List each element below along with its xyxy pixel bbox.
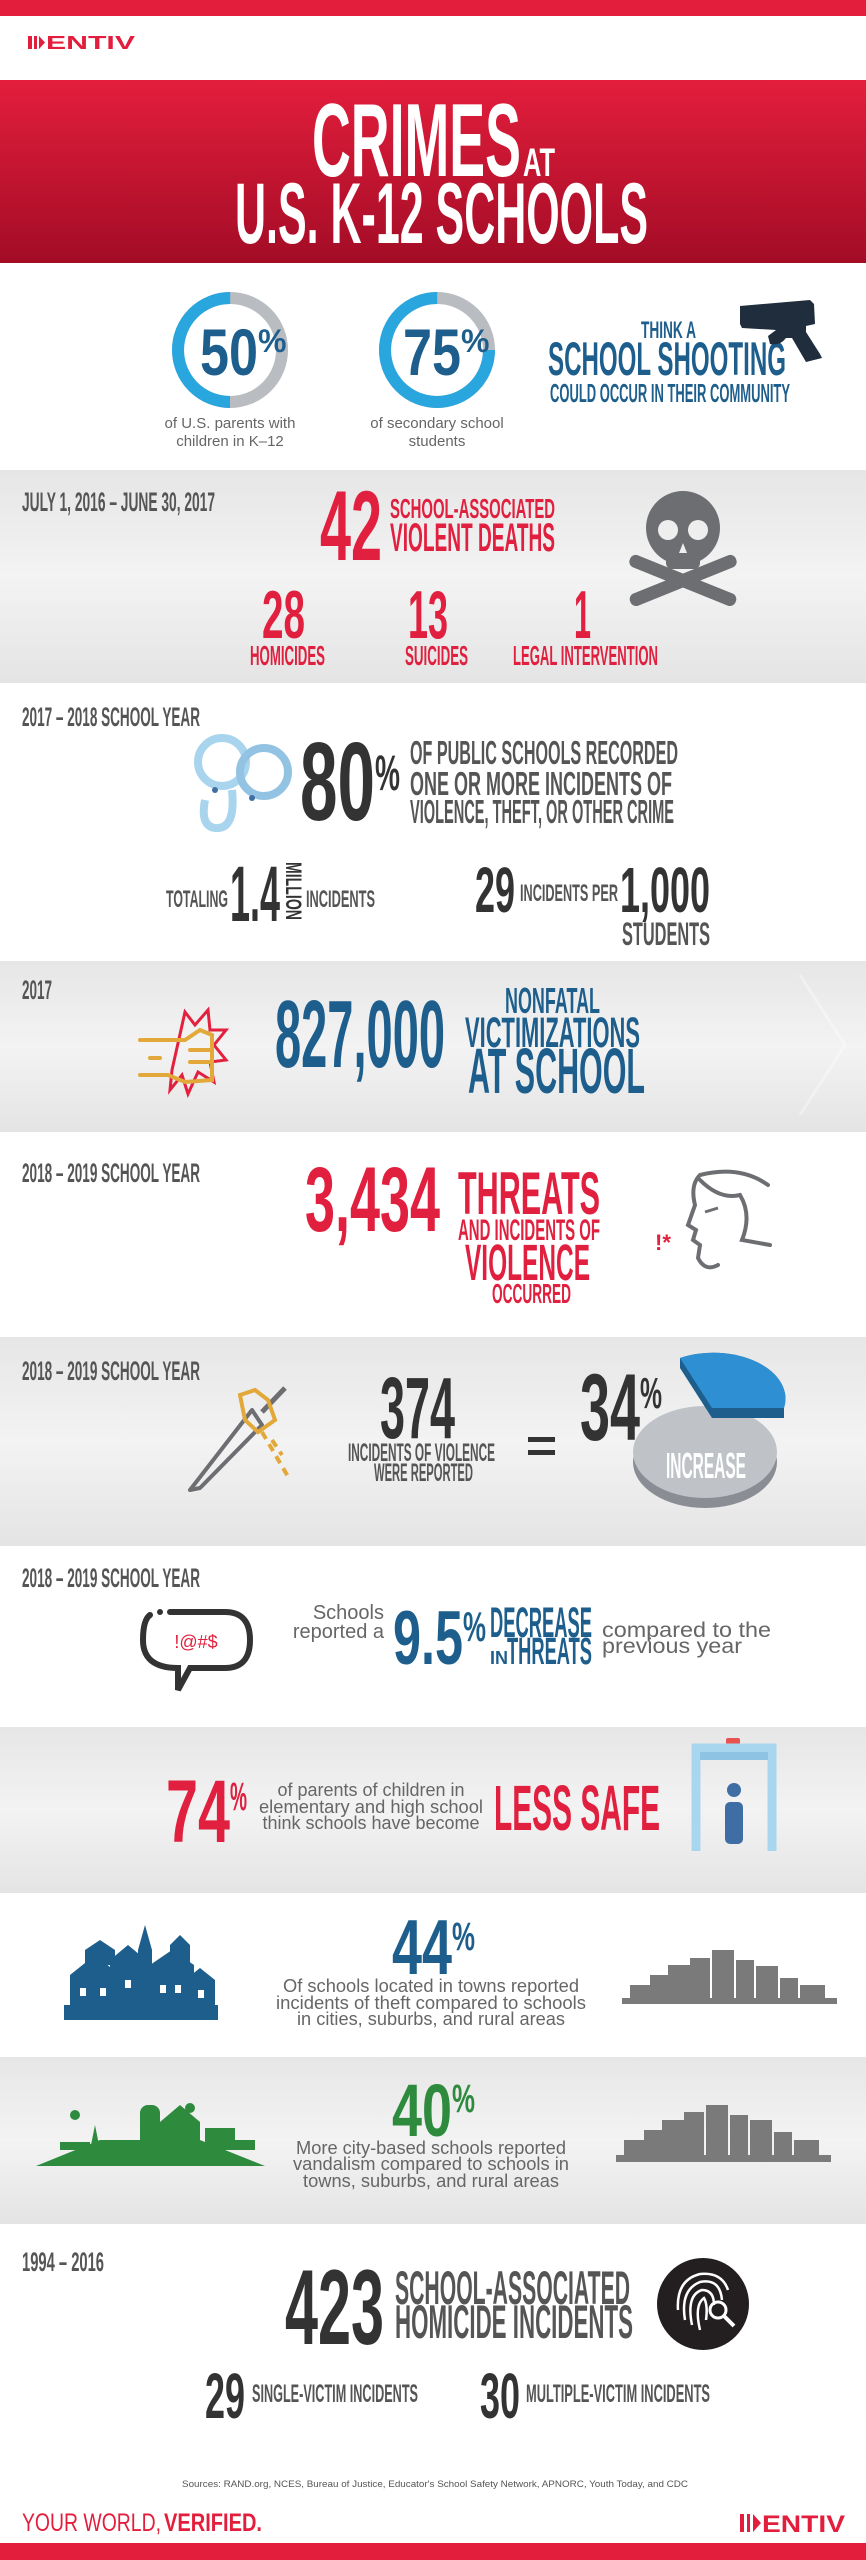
donut: 75% students: students	[409, 433, 465, 450]
icon: shouting face: !*	[655, 1230, 671, 1255]
stat: 13 suicides	[405, 577, 468, 671]
panel: violent deaths: LEGAL INTERVENTION	[513, 640, 658, 671]
panel: 374 incidents: WERE REPORTED	[374, 1459, 473, 1487]
panel: 423 homicide incidents: 1994 – 2016	[22, 2247, 104, 2277]
panel: 9.5% decrease: compared to the	[602, 1619, 771, 1642]
stat: 29 single-victim: 29	[205, 2360, 245, 2432]
stat: 1.4 million: TOTALING	[166, 886, 228, 913]
panel: nonfatal victimizations: 2017	[22, 975, 52, 1005]
panel: 374 incidents	[0, 1337, 866, 1546]
panel: threats 3,434: 3,434	[305, 1149, 440, 1251]
panel: 9.5% decrease: %	[463, 1603, 486, 1650]
panel: 40% vandalism in cities: 40	[392, 2069, 452, 2152]
panel: nonfatal victimizations: NONFATAL	[505, 980, 600, 1021]
panel: 9.5% decrease: previous year	[602, 1635, 742, 1658]
icon: town	[64, 1925, 218, 2020]
logo: identiv bottom	[740, 2511, 845, 2538]
donut: 75% students: of secondary school	[370, 415, 504, 432]
panel: 40% vandalism in cities: towns, suburbs, and rural areas	[303, 2171, 559, 2191]
icon: speech bubble: !@#$	[174, 1632, 218, 1652]
stat: 1.4 million: 1.4	[230, 849, 280, 938]
panel: 74% less safe: %	[230, 1775, 247, 1819]
equals sign	[528, 1437, 555, 1455]
panel: threats 3,434: 2018 – 2019 SCHOOL YEAR	[22, 1158, 200, 1188]
panel: violent deaths: SUICIDES	[405, 640, 468, 671]
panel: 374 incidents: INCIDENTS OF VIOLENCE	[348, 1439, 495, 1467]
stat: 13 suicides: 13	[408, 577, 448, 653]
panel: 74% less safe	[0, 1727, 866, 1893]
donut: 50% parents: children in K–12	[176, 433, 284, 450]
panel: threats 3,434: THREATS	[458, 1160, 600, 1227]
panel: 9.5% decrease: THREATS	[507, 1631, 592, 1673]
stat: 29 per 1,000	[475, 854, 710, 952]
panel: threats 3,434: AND INCIDENTS OF	[458, 1214, 600, 1247]
panel: 40% vandalism in cities	[0, 2057, 866, 2224]
panel: 9.5% decrease: 2018 – 2019 SCHOOL YEAR	[22, 1563, 200, 1593]
stat: 30 multiple-victim: 30	[480, 2360, 520, 2432]
panel: 44% theft in towns: %	[452, 1915, 475, 1959]
stat: 28 homicides	[250, 577, 325, 671]
stat: 29 per 1,000: 29	[475, 854, 515, 926]
stat: 42 deaths: 42	[320, 470, 382, 581]
panel: violent deaths: JULY 1, 2016 – JUNE 30, 2017	[22, 487, 215, 517]
icon: speech bubble	[143, 1609, 250, 1690]
donut: 50% parents	[165, 298, 295, 450]
stat: 1 legal intervention: 1	[574, 577, 591, 653]
stat: 29 single-victim	[205, 2360, 418, 2432]
icon: farm	[36, 2103, 265, 2166]
stat: 1.4 million	[166, 849, 375, 938]
panel: 74% less safe: LESS SAFE	[494, 1772, 660, 1844]
logo: identiv top: ENTIV	[46, 33, 135, 53]
text: think a school shooting	[548, 317, 790, 408]
sources: Sources: RAND.org, NCES, Bureau of Justice, Educator's School Safety Network, APNORC, Youth Today, and CDC	[182, 2479, 688, 2490]
stat: 1.4 million: MILLION	[281, 862, 306, 920]
pie chart: 34% increase	[580, 1353, 785, 1508]
icon: shouting face	[655, 1172, 770, 1267]
icon: knife	[190, 1388, 290, 1490]
donut: 50% parents: 50	[200, 315, 258, 389]
panel: nonfatal victimizations	[0, 961, 866, 1132]
panel: 44% theft in towns: incidents of theft compared to schools	[276, 1993, 586, 2013]
stat: 28 homicides: 28	[262, 577, 305, 653]
pie chart: 34% increase: 34	[580, 1355, 640, 1461]
stat: 42 deaths: SCHOOL-ASSOCIATED	[390, 493, 555, 524]
panel: threats 3,434	[22, 1149, 770, 1309]
pie chart: 34% increase: INCREASE	[666, 1445, 746, 1486]
panel: 40% vandalism in cities: vandalism compared to schools in	[293, 2154, 569, 2174]
panel: 9.5% decrease: Schools	[313, 1602, 384, 1624]
stat: 30 multiple-victim	[480, 2360, 710, 2432]
panel: violent deaths	[0, 470, 866, 683]
panel: 9.5% decrease	[22, 1563, 771, 1690]
stat: 1 legal intervention	[513, 577, 658, 671]
panel: 80% public schools: %	[375, 745, 400, 801]
donut: 75% students: 75	[403, 315, 461, 389]
panel: 74% less safe: think schools have become	[262, 1813, 480, 1833]
header banner	[0, 80, 866, 263]
icon: skull	[628, 491, 738, 608]
panel: violent deaths: HOMICIDES	[250, 640, 325, 671]
footer tagline: VERIFIED.	[164, 2509, 262, 2537]
panel: 9.5% decrease: DECREASE	[490, 1599, 592, 1647]
title: CRIMES	[312, 83, 521, 199]
panel: 40% vandalism in cities: More city-based schools reported	[296, 2138, 566, 2158]
panel: violent deaths: VIOLENT DEATHS	[390, 516, 555, 560]
logo: identiv top	[28, 33, 135, 53]
panel: 74% less safe: of parents of children in	[277, 1780, 465, 1800]
panel: nonfatal victimizations: 827,000	[275, 981, 445, 1088]
panel: 9.5% decrease: IN	[490, 1648, 508, 1668]
text: think a school shooting: THINK A	[641, 317, 696, 344]
icon: handcuffs	[198, 738, 288, 828]
panel: 80% public schools: 2017 – 2018 SCHOOL YEAR	[22, 702, 200, 732]
panel: 423 homicide incidents: 423	[285, 2247, 384, 2367]
stat: 29 per 1,000: 1,000	[620, 854, 710, 926]
footer tagline: YOUR WORLD,	[22, 2509, 161, 2537]
panel: 74% less safe: elementary and high school	[259, 1797, 483, 1817]
stat: 29 per 1,000: INCIDENTS PER	[520, 880, 618, 907]
icon: fingerprint	[657, 2258, 749, 2350]
icon: city skyline 2	[616, 2105, 831, 2162]
panel: 80% public schools: 80	[300, 720, 375, 844]
panel: nonfatal victimizations: AT SCHOOL	[468, 1035, 645, 1107]
panel: nonfatal victimizations: VICTIMIZATIONS	[465, 1009, 640, 1057]
donut: 50% parents: %	[258, 323, 286, 359]
stat: 42 deaths	[320, 470, 555, 581]
icon: fist	[140, 1010, 226, 1094]
panel: 74% less safe: 74	[166, 1761, 230, 1861]
pie chart: 34% increase: %	[640, 1369, 662, 1418]
logo: identiv bottom: ENTIV	[762, 2511, 845, 2538]
panel: 44% theft in towns	[64, 1903, 837, 2029]
stat: 29 per 1,000: STUDENTS	[622, 916, 710, 952]
panel: 44% theft in towns: 44	[392, 1903, 452, 1991]
icon: handgun	[740, 300, 822, 362]
panel: threats 3,434: VIOLENCE	[465, 1234, 590, 1291]
panel: 9.5% decrease: 9.5	[393, 1596, 463, 1681]
icon: security scanner	[696, 1738, 772, 1851]
panel: 423 homicide incidents	[22, 2247, 749, 2432]
panel: threats 3,434: OCCURRED	[492, 1278, 571, 1309]
title	[235, 83, 648, 262]
donut: 75% students: %	[461, 323, 489, 359]
donut: 50% parents: of U.S. parents with	[165, 415, 295, 432]
stat: 1.4 million: INCIDENTS	[306, 886, 375, 913]
title: AT	[523, 141, 555, 185]
panel: 44% theft in towns: Of schools located in towns reported	[283, 1976, 579, 1996]
panel: 374 incidents: 2018 – 2019 SCHOOL YEAR	[22, 1356, 200, 1386]
panel: 374 incidents: 374	[380, 1360, 455, 1457]
panel: 9.5% decrease: reported a	[293, 1621, 385, 1643]
panel: 44% theft in towns: in cities, suburbs, and rural areas	[297, 2009, 565, 2029]
panel: 40% vandalism in cities: %	[452, 2077, 475, 2121]
stat: 29 single-victim: SINGLE-VICTIM INCIDENTS	[252, 2380, 418, 2408]
panel: 80% public schools	[22, 702, 710, 952]
donut: 75% students	[370, 298, 504, 450]
icon: city skyline	[622, 1950, 837, 2004]
